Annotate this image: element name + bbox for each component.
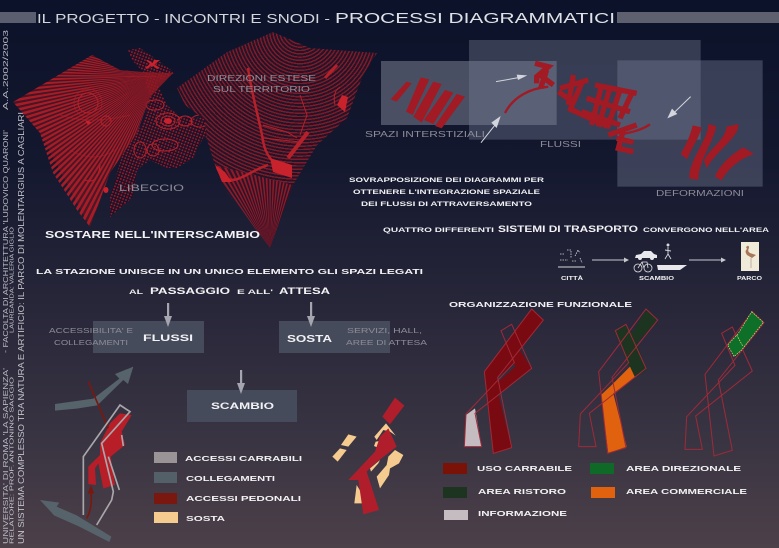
- heading: sostare nell'interscambio: SOSTARE NELL'INTERSCAMBIO: [45, 230, 260, 241]
- arrow: to flussi: [164, 303, 172, 327]
- parking plan: building: [348, 398, 404, 514]
- map label: direzioni estese: [207, 74, 316, 94]
- title: [37, 11, 615, 27]
- legend: plan: ACCESSI PEDONALI: [186, 496, 301, 503]
- icon: pedestrian: [665, 244, 671, 259]
- legend: functions: AREA DIREZIONALE: [626, 466, 742, 473]
- diagram: uso carrabile: [464, 309, 543, 453]
- label: spazi interstiziali: SPAZI INTERSTIZIALI: [365, 130, 485, 139]
- panel: sosta box: AREE DI ATTESA: [346, 340, 427, 347]
- side credits: UN SISTEMA COMPLESSO TRA NATURA E ARTIFICIO: IL PARCO DI MOLENTARGIUS A CAGLIARI: [16, 112, 26, 544]
- labels: transport nodes: [561, 275, 763, 282]
- map label: direzioni estese: SUL TERRITORIO: [213, 85, 310, 94]
- panel: flussi box: [49, 321, 204, 353]
- panel: sosta box: [279, 321, 427, 353]
- text: sovrapposizione: SOVRAPPOSIZIONE DEI DIAGRAMMI PER: [349, 177, 544, 184]
- diagram: flows: [505, 63, 650, 152]
- panel: sosta box: SOSTA: [287, 334, 332, 345]
- plan: upper link arrow: [55, 367, 133, 411]
- arrow: exchange to park: [689, 258, 726, 262]
- side credits: [1, 30, 26, 544]
- text: la stazione unisce: PASSAGGIO: [150, 286, 230, 296]
- text: sovrapposizione: [349, 177, 544, 208]
- map: left lobe fan: [13, 55, 173, 226]
- heading: organizzazione funzionale: ORGANIZZAZIONE FUNZIONALE: [449, 300, 632, 309]
- panel: flussi box: COLLEGAMENTI: [54, 340, 128, 347]
- text: la stazione unisce: [36, 267, 423, 296]
- map: right lobe fan: [216, 166, 293, 248]
- diagram: ristoro and commerciale: [579, 309, 658, 453]
- icon: city: [558, 250, 585, 267]
- arrows: flow directions: [481, 75, 691, 143]
- legend: functions: USO CARRABILE: [477, 466, 573, 473]
- text: sovrapposizione: OTTENERE L'INTEGRAZIONE SPAZIALE: [353, 189, 541, 196]
- diagram: direzionale: [685, 312, 764, 456]
- map: bright features: [217, 65, 337, 180]
- overlapping diagrams: [381, 40, 763, 187]
- legend: functions: [443, 463, 748, 520]
- text: la stazione unisce: E ALL': [237, 289, 274, 296]
- legend: functions: INFORMAZIONE: [478, 511, 568, 518]
- legend: plan: [154, 452, 302, 523]
- legend: plan: ACCESSI CARRABILI: [185, 456, 302, 463]
- text: sistemi di trasporto: QUATTRO DIFFERENTI: [383, 227, 494, 234]
- map: central dotted lobe: [110, 48, 227, 217]
- arrow: to scambio: [237, 370, 245, 394]
- text: sistemi di trasporto: [383, 224, 769, 234]
- legend: plan: SOSTA: [186, 516, 225, 523]
- label: flussi: FLUSSI: [540, 140, 581, 149]
- label: deformazioni: DEFORMAZIONI: [656, 189, 744, 198]
- side credits: LAUREANDA: VALERIA GIGLIO: [10, 226, 16, 333]
- arrow: city to exchange: [592, 258, 629, 262]
- diagrams: functional organisation: [464, 309, 764, 456]
- plan: parking zones: [332, 398, 404, 514]
- diagram: deformed bands: [681, 124, 754, 181]
- labels: transport nodes: SCAMBIO: [639, 276, 675, 282]
- diagram: interstitial stripes: [391, 77, 465, 128]
- panel: scambio box: SCAMBIO: [211, 401, 274, 411]
- icon: boat: [657, 265, 687, 270]
- side credits: A.A.2002/2003: [1, 30, 10, 110]
- icon: flamingo: [741, 242, 759, 271]
- labels: transport nodes: PARCO: [737, 276, 763, 282]
- text: la stazione unisce: LA STAZIONE UNISCE IN UN UNICO ELEMENTO GLI SPAZI LEGATI: [36, 267, 423, 276]
- text: la stazione unisce: ATTESA: [279, 286, 331, 296]
- map: hot spots: [85, 60, 348, 193]
- arrow: to sosta: [307, 302, 315, 327]
- legend: plan: COLLEGAMENTI: [186, 476, 275, 483]
- map: central rings: [134, 100, 209, 158]
- title: IL PROGETTO - INCONTRI E SNODI -: [37, 12, 330, 26]
- plan: red building: [88, 413, 132, 488]
- plan: road accesses: [83, 405, 130, 525]
- side credits: UNIVERSITA' DI ROMA 'LA SAPIENZA': [1, 367, 10, 544]
- map label: libeccio: LIBECCIO: [119, 183, 184, 193]
- text: sistemi di trasporto: SISTEMI DI TRASPORTO: [498, 224, 638, 234]
- icon: car: [635, 251, 657, 260]
- panel: scambio box: [187, 390, 297, 422]
- icon: bicycle: [634, 262, 652, 272]
- legend: functions: AREA COMMERCIALE: [626, 489, 748, 496]
- wind map: [13, 32, 377, 248]
- legend: functions: AREA RISTORO: [478, 489, 567, 496]
- map label: direzioni estese: DIREZIONI ESTESE: [207, 74, 316, 83]
- panel: flussi box: ACCESSIBILITA' E: [49, 328, 133, 335]
- panel: sosta box: SERVIZI, HALL,: [347, 328, 422, 335]
- map: thin lines: [263, 87, 340, 142]
- text: sistemi di trasporto: CONVERGONO NELL'AREA: [643, 227, 769, 234]
- side credits: RELATORE: PROF. ANTONINO SAGGIO: [10, 376, 16, 544]
- text: la stazione unisce: AL: [129, 289, 143, 296]
- side credits: - FACOLTA DI ARCHITETTURA 'LUDOVICO QUARONI': [1, 129, 10, 353]
- transport scheme: [558, 242, 763, 282]
- title: PROCESSI DIAGRAMMATICI: [335, 11, 615, 27]
- plan: lower link arrow: [40, 500, 111, 542]
- panel: deformazioni: [617, 60, 763, 187]
- plan: accesses and links: [40, 367, 133, 542]
- plan: pedestrian access: [87, 382, 108, 518]
- panel: flussi box: FLUSSI: [143, 333, 193, 343]
- text: sovrapposizione: DEI FLUSSI DI ATTRAVERSAMENTO: [361, 201, 532, 208]
- panel: spazi interstiziali: [381, 61, 557, 125]
- panel: flussi: [469, 40, 701, 140]
- map: right lobe rings: [177, 32, 377, 185]
- header bar: [0, 12, 779, 23]
- labels: transport nodes: CITTÀ: [561, 275, 583, 282]
